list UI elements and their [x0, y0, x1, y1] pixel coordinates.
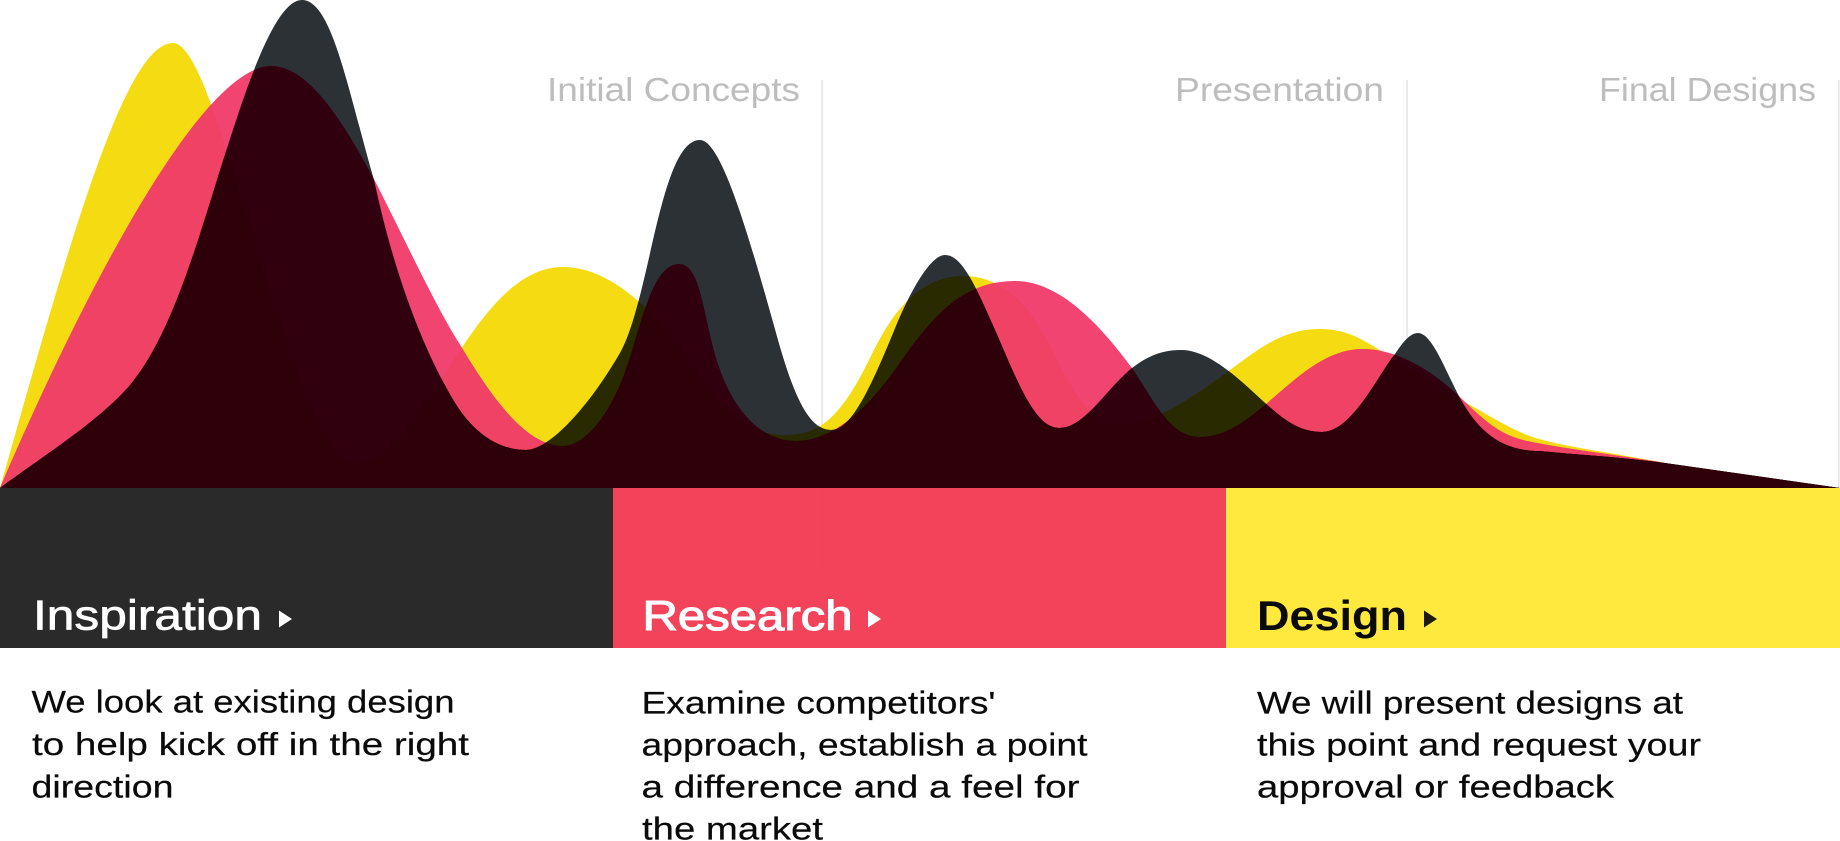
overlapping wave chart [0, 0, 1840, 488]
stage label: Presentation: Presentation [1175, 71, 1384, 108]
text: Inspiration description [32, 684, 469, 804]
text: Inspiration description: to help kick off in the right [32, 726, 469, 762]
wave: inspiration (dark) [0, 0, 1840, 488]
heading: Inspiration: Inspiration [33, 592, 262, 638]
arrow: Inspiration [279, 610, 292, 628]
heading: Research: Research [642, 592, 852, 639]
overlap: dark over yellow [0, 150, 1839, 488]
stage label: Final Designs: Final Designs [1599, 71, 1816, 108]
text: Research description: Examine competitors' [642, 684, 996, 720]
text: Inspiration description: direction [32, 768, 174, 804]
text: Design description: We will present designs at [1257, 684, 1683, 720]
text: Design description: this point and request your [1257, 727, 1701, 763]
text: Research description [642, 684, 1088, 841]
overlap: pink over yellow [0, 104, 1741, 488]
stage labels and divider lines [547, 71, 1840, 488]
overlap: dark over pink and yellow [0, 150, 1838, 488]
text: Design description [1257, 684, 1701, 804]
panel: Design [1226, 488, 1840, 804]
panel: Inspiration [0, 488, 613, 804]
panel: Research [613, 488, 1226, 841]
wave: design (yellow) [0, 43, 1840, 488]
arrow: Research [868, 610, 881, 628]
arrow: Design [1424, 610, 1437, 628]
text: Inspiration description: We look at existing design [32, 684, 455, 720]
heading: Design: Design [1257, 592, 1407, 639]
text: Research description: approach, establish a point [642, 727, 1088, 763]
wave: research (pink) [0, 66, 1840, 488]
text: Design description: approval or feedback [1257, 768, 1614, 804]
overlap: dark over pink [0, 66, 1839, 488]
text: Research description: a difference and a feel for [642, 769, 1080, 805]
stage label: Initial Concepts: Initial Concepts [547, 71, 800, 108]
